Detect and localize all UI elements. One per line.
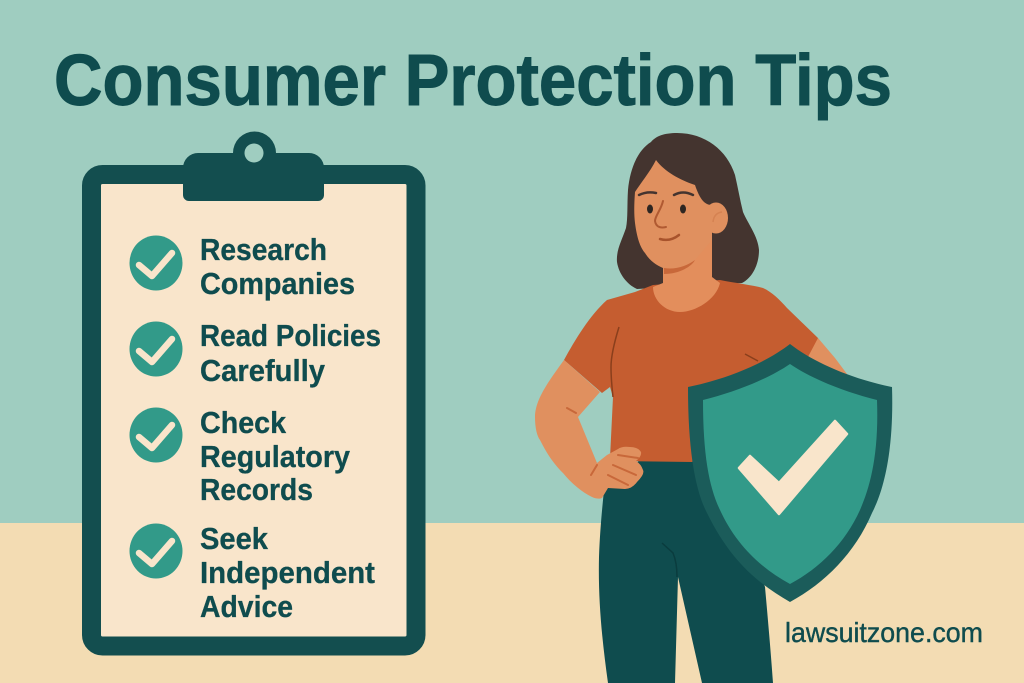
woman illustration <box>535 133 850 683</box>
shirt <box>564 280 818 462</box>
trouser crease <box>662 543 677 577</box>
ear <box>704 202 728 234</box>
website label: lawsuitzone.com <box>785 617 983 648</box>
legs <box>599 460 773 683</box>
hand and arm lines <box>567 408 638 485</box>
neck shadow <box>664 260 695 274</box>
icon: shield with check <box>688 344 892 602</box>
tip 3 <box>130 406 350 507</box>
tip 3: Regulatory <box>200 440 350 474</box>
panel: clipboard checklist <box>92 132 416 646</box>
tip 4: Independent <box>200 556 375 590</box>
face <box>634 160 712 269</box>
right arm <box>800 338 850 378</box>
tip 3: Records <box>200 473 313 507</box>
tip 1: Research <box>200 233 327 267</box>
clipboard clip <box>183 132 324 201</box>
title: Consumer Protection Tips <box>54 41 892 121</box>
tip 3: Check <box>200 406 286 440</box>
tip 4 <box>130 522 375 624</box>
left arm <box>535 360 643 499</box>
tip 1 <box>130 233 355 301</box>
tip 2: Carefully <box>200 354 325 388</box>
tip 2: Read Policies <box>200 319 381 353</box>
facial features <box>639 192 722 240</box>
shirt creases <box>611 327 758 397</box>
clipboard board <box>92 174 416 646</box>
hair <box>617 133 759 289</box>
neck <box>653 228 720 312</box>
tip 2 <box>130 319 381 388</box>
background floor <box>0 523 1024 683</box>
tip 1: Companies <box>200 267 355 301</box>
tip 4: Advice <box>200 590 293 624</box>
tip 4: Seek <box>200 522 268 556</box>
